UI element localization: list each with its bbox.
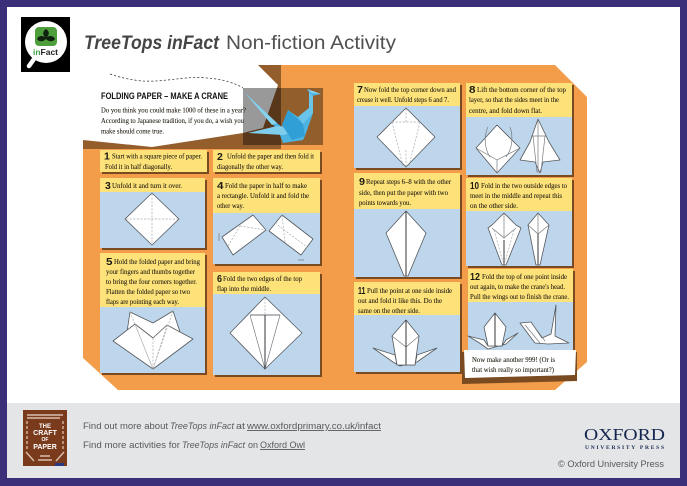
step 10: 10 — [470, 180, 479, 192]
step 4: Fold the paper in half to make — [225, 181, 308, 190]
intro text: According to Japanese tradition, if you do, a wish you — [101, 116, 244, 125]
step 11: same on the other side. — [358, 306, 420, 315]
step 11: out and fold it like this. Do the — [358, 296, 443, 305]
step 5: your fingers and thumbs together — [106, 267, 195, 276]
photo: blue origami crane — [245, 89, 321, 143]
book cover: The Craft of Paper: CRAFT — [33, 430, 58, 437]
step 10: meet in the middle and repeat this — [470, 191, 562, 200]
step 6: Fold the two edges of the top — [223, 274, 302, 283]
step 2 — [213, 150, 322, 174]
footer link text — [83, 421, 382, 450]
step 9: side, then put the paper with two — [359, 188, 448, 197]
footer link text: at — [236, 421, 246, 431]
footer link text: www.oxfordprimary.co.uk/infact — [246, 421, 382, 431]
step 1: Start with a square piece of paper. — [112, 152, 202, 160]
step 4: other way. — [217, 201, 244, 210]
title: TreeTops inFact — [84, 32, 220, 54]
dashed flight path — [110, 74, 243, 88]
step 8: 8 — [469, 84, 476, 96]
step 8 — [466, 83, 574, 177]
book cover: The Craft of Paper: PAPER — [33, 444, 57, 451]
orange activity background — [83, 65, 587, 390]
step 12 — [468, 269, 575, 353]
step 6: 6 — [217, 273, 222, 285]
step 4 — [213, 178, 322, 266]
step 5: flaps are pointing each way. — [106, 297, 179, 306]
step 5: Hold the folded paper and bring — [114, 257, 200, 266]
step 5 — [100, 253, 207, 375]
grey photo backing — [243, 88, 323, 145]
step 9 — [354, 173, 462, 279]
step 10: Fold in the two outside edges to — [481, 181, 567, 190]
step 12: 12 — [470, 271, 480, 283]
step 3 — [100, 178, 207, 250]
step 12: Fold the top of one point inside — [482, 272, 568, 281]
step 2: diagonally the other way. — [217, 162, 283, 171]
step 10 — [466, 178, 574, 268]
step 3: Unfold it and turn it over. — [112, 181, 182, 190]
closing note: that wish really so important?) — [472, 365, 554, 374]
Oxford University Press logo: OXFORD — [584, 425, 665, 444]
step 7: 7 — [357, 84, 363, 96]
footer link text: Find out more about — [83, 421, 169, 431]
footer link text: on — [248, 440, 258, 450]
step 11: 11 — [358, 285, 366, 297]
step 7 — [354, 83, 462, 170]
step 8: centre, and fold down flat. — [469, 106, 542, 115]
heading: FOLDING PAPER – MAKE A CRANE — [101, 91, 228, 101]
step 11: Pull the point at one side inside — [367, 286, 453, 295]
Oxford University Press logo — [584, 425, 665, 451]
intro text: Do you think you could make 1000 of these in a year? — [101, 106, 246, 114]
step 4: 4 — [217, 180, 224, 192]
book cover: The Craft of Paper: OF — [42, 437, 48, 443]
step 9: points towards you. — [359, 198, 411, 207]
step 8: Lift the bottom corner of the top — [477, 85, 566, 94]
intro text: make should come true. — [101, 126, 164, 136]
copyright: © Oxford University Press — [558, 459, 665, 469]
footer link text: Find more activities for — [83, 440, 180, 450]
step 3: 3 — [105, 180, 111, 192]
step 11 — [354, 282, 462, 374]
step 9: Repeat steps 6–8 with the other — [366, 177, 451, 186]
step 5: Flatten the folded paper so two — [106, 287, 190, 296]
step 2: Unfold the paper and then fold it — [227, 152, 315, 160]
footer link text: Oxford Owl — [260, 440, 305, 450]
book cover: The Craft of Paper — [23, 410, 67, 466]
logo: TreeTops inFact — [21, 17, 70, 72]
step 7: Now fold the top corner down and — [364, 85, 456, 94]
step 5: 5 — [106, 256, 113, 268]
step 6 — [213, 272, 322, 377]
step 1: 1 — [104, 150, 110, 162]
step 4: a rectangle. Unfold it and fold the — [217, 191, 310, 200]
step 7: crease it well. Unfold steps 6 and 7. — [357, 95, 449, 104]
step 2: 2 — [217, 151, 223, 163]
step 10: on the other side. — [470, 201, 518, 210]
Oxford University Press logo: UNIVERSITY PRESS — [585, 445, 664, 451]
footer link text: TreeTops inFact — [182, 440, 245, 450]
logo: TreeTops inFact: inFact — [33, 47, 58, 57]
step 6: flap into the middle. — [217, 284, 271, 293]
step 1: Fold it in half diagonally. — [105, 162, 172, 171]
title — [84, 32, 396, 54]
step 12: out again, to make the crane's head. — [470, 282, 565, 291]
step 5: to bring the four corners together. — [106, 277, 197, 286]
step 8: layer, so that the sides meet in the — [469, 95, 560, 104]
footer band background — [7, 403, 680, 478]
step 1 — [100, 150, 209, 174]
step 9: 9 — [359, 176, 365, 188]
intro text — [101, 106, 246, 136]
closing note: Now make another 999! (Or is — [472, 355, 555, 364]
step 12: Pull the wings out to finish the crane. — [470, 292, 569, 301]
title: Non-fiction Activity — [226, 32, 396, 54]
book cover: The Craft of Paper: THE — [39, 424, 51, 430]
closing note — [462, 350, 577, 384]
footer link text: TreeTops inFact — [170, 421, 234, 431]
